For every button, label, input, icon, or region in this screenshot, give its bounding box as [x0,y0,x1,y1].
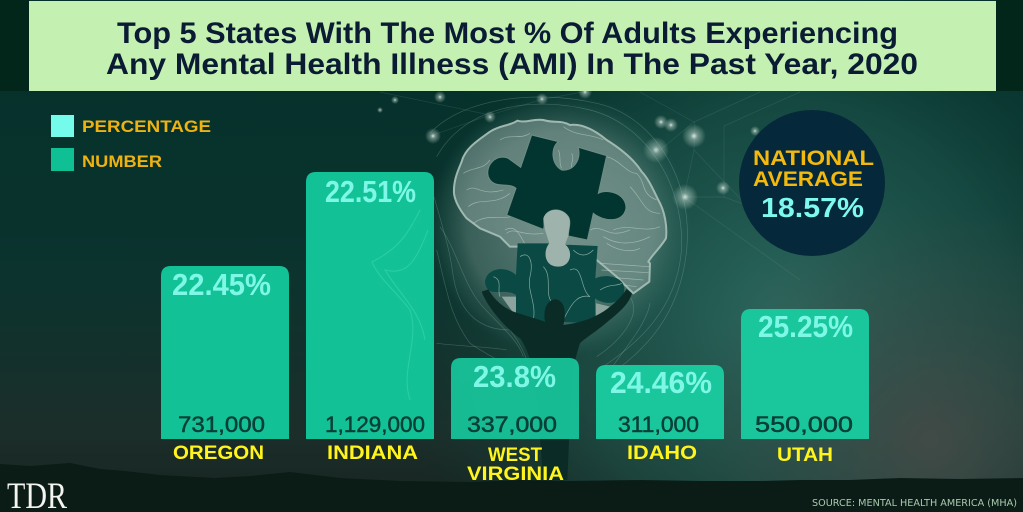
bar: Idaho: 311,000 [618,412,699,437]
bar: West Virginia: 337,000 [467,412,557,437]
decorative contour rings [430,97,687,370]
source note: SOURCE: MENTAL HEALTH AMERICA (MHA) [812,498,1017,509]
bar: Idaho [596,365,724,464]
callout: national average: AVERAGE [753,168,863,191]
legend: NUMBER [82,152,162,171]
title text: Any Mental Health Illness (AMI) In The Past Year, 2020 [106,48,918,81]
bar: Oregon: 731,000 [178,412,265,437]
bar: Indiana: INDIANA [327,443,418,464]
callout: national average: 18.57% [761,192,864,223]
bar: Indiana [306,172,434,464]
title banner [29,1,996,91]
gaps between arms and piece [502,297,610,318]
bar: Indiana: 22.51% [325,174,416,209]
bar: West Virginia: VIRGINIA [467,464,564,485]
title text: Top 5 States With The Most % Of Adults Experiencing [117,17,898,50]
bar: West Virginia: WEST [488,445,542,466]
tab stem highlight [543,210,570,267]
bar: Utah [741,309,869,466]
bar: West Virginia [451,358,579,485]
ground silhouette [0,463,1023,512]
callout: national average: NATIONAL [753,147,874,170]
brain folds [463,127,660,287]
callout: national average [739,110,885,256]
bar: Oregon: 22.45% [172,267,271,302]
figure silhouette [482,289,632,480]
bar: Utah: UTAH [777,445,833,466]
bar: Utah: 25.25% [758,309,853,344]
bar: Idaho: 24.46% [610,365,712,400]
legend: PERCENTAGE [82,117,211,136]
bar: Utah: 550,000 [755,412,853,437]
legend [51,115,211,171]
missing-piece hole [488,135,626,240]
bar: Indiana: 1,129,000 [325,412,425,437]
bar: Idaho: IDAHO [627,443,697,464]
title text [106,17,918,81]
stars and constellation lines [377,85,800,280]
bar: Oregon [161,266,289,464]
illustration: brain with puzzle pieces and raised-arms figure [428,93,692,480]
raised puzzle piece [485,243,624,323]
brain outline [454,120,666,293]
bar: Oregon: OREGON [173,443,264,464]
piece pattern [493,250,622,320]
bar: West Virginia: 23.8% [473,359,556,394]
